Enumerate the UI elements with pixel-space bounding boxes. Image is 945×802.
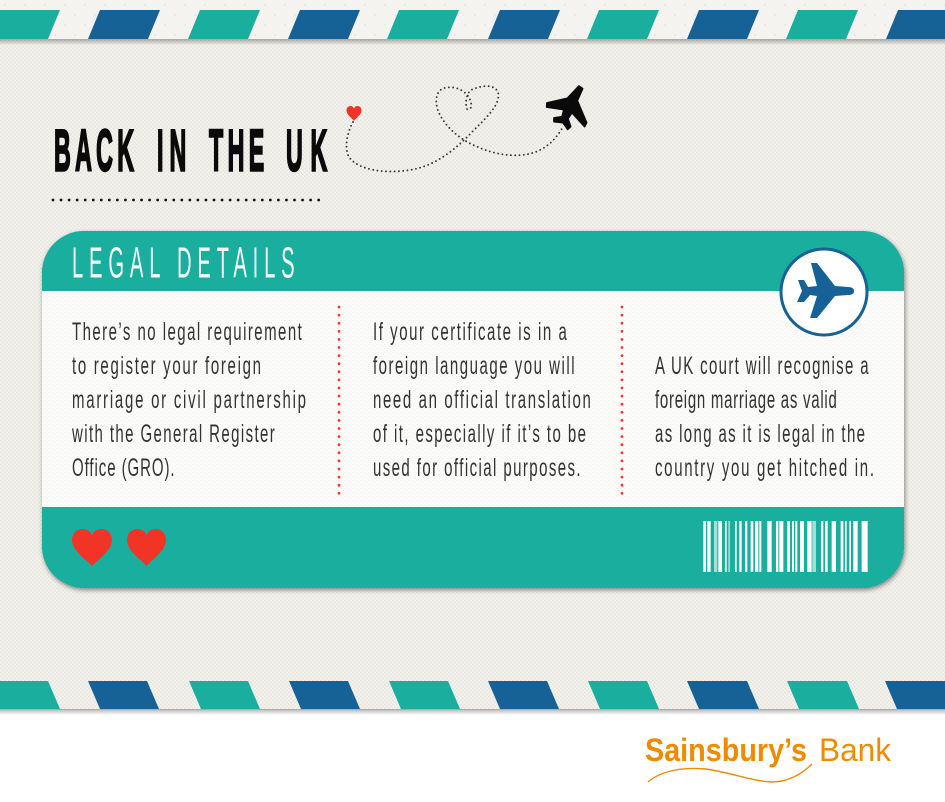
text block: column 1: to register your foreign — [72, 352, 261, 380]
text block: column 2: foreign language you will — [373, 352, 575, 380]
divider: red dotted right — [621, 307, 623, 496]
icon: two red hearts — [72, 529, 166, 566]
heading: legal details: LEGAL DETAILS — [72, 239, 295, 288]
text block: column 3: foreign marriage as valid — [655, 386, 837, 414]
text block: column 2 — [373, 318, 591, 482]
icon: black airplane — [547, 86, 587, 129]
title: IN — [157, 119, 186, 184]
title — [54, 119, 327, 184]
title: BACK — [54, 119, 134, 184]
text block: column 1 — [71, 318, 306, 482]
text block: column 3 — [655, 352, 874, 482]
title dotted underline — [53, 199, 324, 201]
text block: column 1: There’s no legal requirement — [72, 318, 302, 346]
icon: small red heart — [346, 106, 362, 121]
text block: column 2: of it, especially if it’s to be — [373, 420, 586, 448]
panel: legal details card — [42, 231, 904, 588]
dotted heart flight path — [346, 86, 563, 171]
text block: column 2: If your certificate is in a — [373, 318, 567, 346]
footer white strip — [0, 709, 945, 802]
text block: column 1: with the General Register — [71, 420, 275, 448]
logo: Sainsbury's Bank: Sainsbury’s — [645, 732, 807, 768]
text block: column 3: A UK court will recognise a — [655, 352, 869, 380]
logo: Sainsbury's Bank — [645, 732, 892, 782]
bottom airmail stripe band — [0, 681, 945, 709]
text block: column 3: as long as it is legal in the — [655, 420, 865, 448]
title: UK — [286, 119, 327, 184]
text block: column 1: Office (GRO). — [72, 454, 175, 482]
logo: Sainsbury's Bank: Bank — [819, 732, 892, 768]
text block: column 2: used for official purposes. — [373, 454, 581, 482]
title: THE — [209, 119, 264, 184]
text block: column 2: need an official translation — [373, 386, 591, 414]
barcode — [703, 521, 868, 572]
text block: column 1: marriage or civil partnership — [72, 386, 306, 414]
divider: red dotted left — [338, 307, 340, 496]
top airmail stripe band — [0, 0, 945, 45]
text block: column 3: country you get hitched in. — [655, 454, 874, 482]
icon: blue airplane in circle — [781, 249, 867, 335]
